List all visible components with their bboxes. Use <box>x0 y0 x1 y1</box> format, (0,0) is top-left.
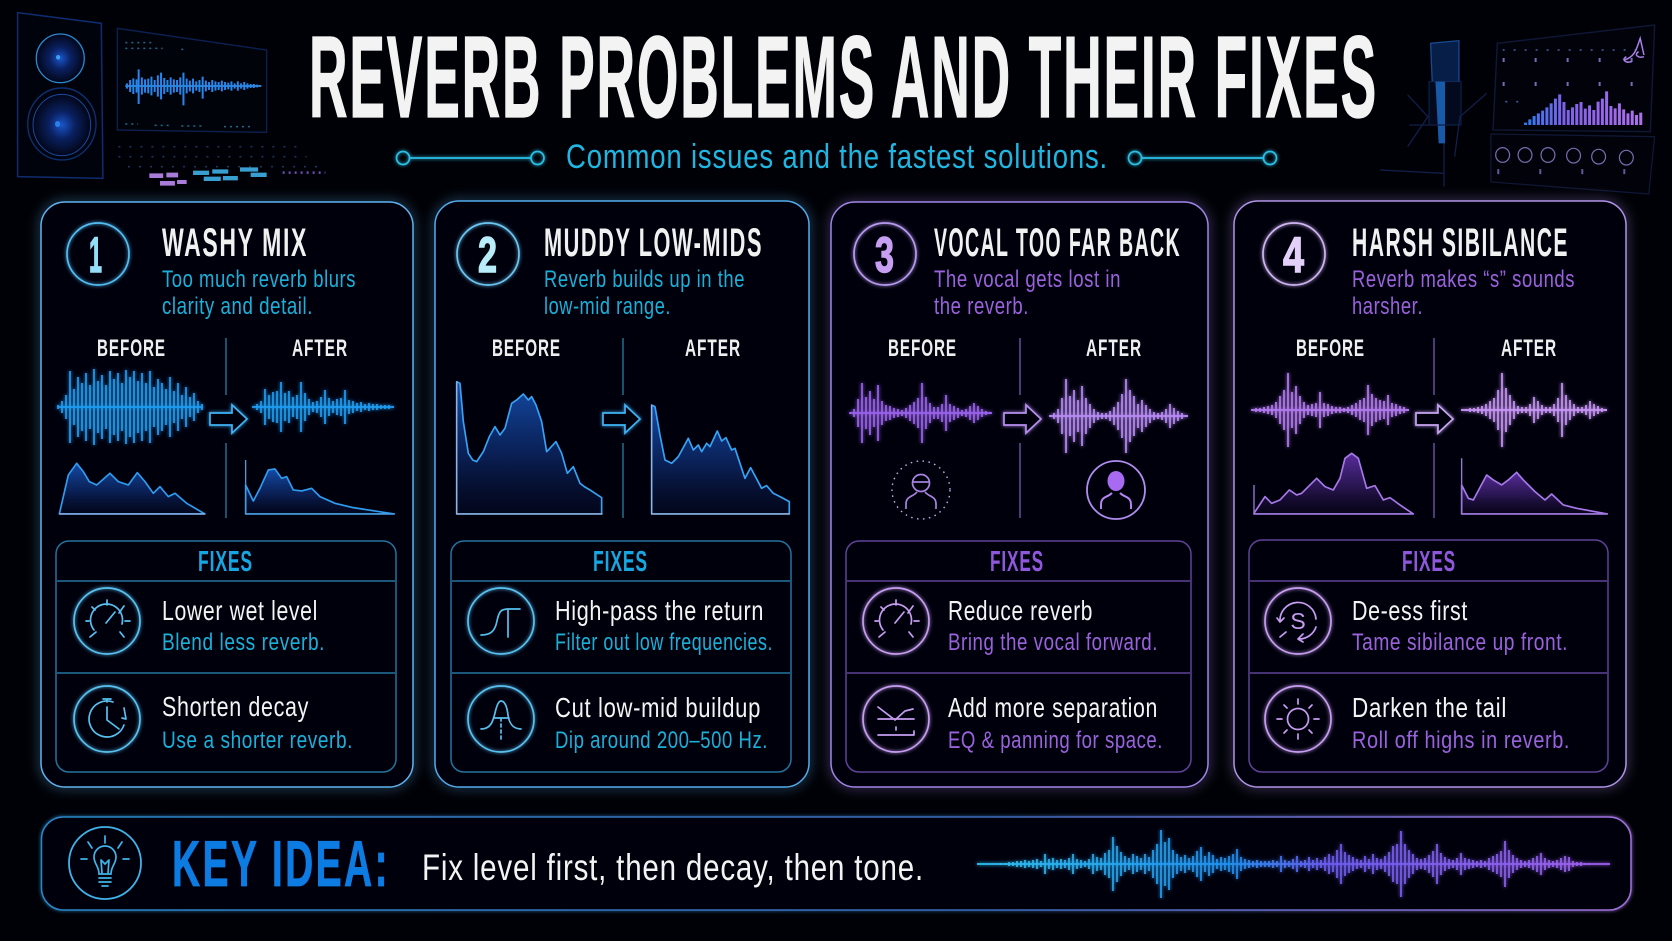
number badge 3 <box>854 223 916 285</box>
subtitle: Common issues and the fastest solutions. <box>566 138 1108 176</box>
panel frame <box>435 201 809 787</box>
description: clarity and detail. <box>162 293 313 320</box>
icon: gauge <box>74 588 140 654</box>
before label: BEFORE <box>1296 335 1365 362</box>
before label: BEFORE <box>492 335 561 362</box>
fixes heading: FIXES <box>990 546 1044 578</box>
waveform before <box>850 383 992 443</box>
waveform after <box>1462 373 1607 447</box>
fix 2 text: Add more separation <box>948 692 1158 723</box>
fix 2 text: Darken the tail <box>1352 692 1507 723</box>
fix 2 text: EQ & panning for space. <box>948 727 1163 754</box>
panel: 2 muddy low-mids <box>435 201 809 787</box>
after label: AFTER <box>1501 335 1557 362</box>
fixes box <box>1249 540 1608 772</box>
icon: gauge <box>863 588 929 654</box>
heading: MUDDY LOW-MIDS <box>544 221 763 265</box>
icon: light bulb <box>69 827 141 899</box>
fix 2 text: Use a shorter reverb. <box>162 727 353 754</box>
fix 1 text: Lower wet level <box>162 595 318 626</box>
fix 2 text: Shorten decay <box>162 691 309 722</box>
after label: AFTER <box>685 335 741 362</box>
fix 1 text <box>1352 595 1568 656</box>
number badge 2 <box>457 223 519 285</box>
icon: waveform monitor <box>117 28 267 132</box>
fixes box <box>451 541 791 772</box>
icon: sun <box>1265 686 1331 752</box>
icon: bell curve <box>468 686 534 752</box>
subtitle ornament right <box>1128 152 1277 164</box>
after label: AFTER <box>1086 335 1142 362</box>
number badge 1 <box>67 223 129 285</box>
fix 2 text <box>162 691 353 754</box>
description: Reverb builds up in the <box>544 266 745 293</box>
description: Reverb makes “s” sounds <box>1352 266 1575 293</box>
panel frame <box>831 202 1208 787</box>
fix 1 text: High-pass the return <box>555 595 764 626</box>
number badge 1: 1 <box>89 227 102 283</box>
key idea label: KEY IDEA: <box>172 827 390 900</box>
fix 2 text: Roll off highs in reverb. <box>1352 727 1570 754</box>
icon: microphone <box>1380 41 1487 187</box>
before label: BEFORE <box>888 335 957 362</box>
fix 2 text: Dip around 200–500 Hz. <box>555 727 768 754</box>
fix 1 text: Blend less reverb. <box>162 629 325 656</box>
fixes box <box>56 541 396 772</box>
fix 1 text: Tame sibilance up front. <box>1352 629 1568 656</box>
fixes heading: FIXES <box>1402 546 1456 578</box>
panel: key idea banner <box>42 817 1631 910</box>
panel frame <box>41 202 413 787</box>
fix 1 text: Reduce reverb <box>948 595 1093 626</box>
fix 2 text <box>555 692 768 754</box>
heading: WASHY MIX <box>162 221 308 265</box>
header art: studio speaker, monitor and controller <box>18 13 325 186</box>
fix 2 text <box>948 692 1163 754</box>
description: low-mid range. <box>544 293 671 320</box>
fix 1 text: Filter out low frequencies. <box>555 629 773 656</box>
description: Too much reverb blurs <box>162 266 356 293</box>
fix 2 text: Cut low-mid buildup <box>555 692 761 723</box>
icon: clear vocalist <box>1087 461 1145 519</box>
icon: speaker cabinet <box>18 13 103 178</box>
spectrum before and after <box>457 382 790 514</box>
waveform after <box>1050 379 1188 453</box>
icon: clock <box>74 686 140 752</box>
number badge 3: 3 <box>875 227 894 283</box>
number badge 2: 2 <box>478 227 497 283</box>
banner frame <box>42 817 1631 910</box>
icon: de-ess: S <box>1290 608 1306 634</box>
arrow <box>210 405 247 433</box>
key idea statement: Fix level first, then decay, then tone. <box>422 847 924 888</box>
spectrum before and after <box>1254 453 1607 514</box>
number badge 4: 4 <box>1283 227 1304 283</box>
description <box>544 266 745 320</box>
waveform blue to purple <box>977 830 1610 898</box>
waveform after <box>253 382 393 432</box>
fix 1 text: Bring the vocal forward. <box>948 629 1158 656</box>
panel: 3 vocal too far back <box>831 202 1208 787</box>
arrow <box>603 405 640 433</box>
icon: controller with pads <box>118 147 325 186</box>
fixes heading: FIXES <box>593 546 648 578</box>
fix 2 text <box>1352 692 1570 754</box>
arrow <box>1416 405 1453 433</box>
spectrum before and after <box>59 460 394 514</box>
waveform before <box>1252 373 1409 447</box>
description: the reverb. <box>934 293 1029 320</box>
description <box>934 266 1121 320</box>
number badge 4 <box>1263 223 1325 285</box>
fixes heading: FIXES <box>198 546 253 578</box>
description <box>1352 266 1575 320</box>
icon: high-pass curve <box>468 588 534 654</box>
icon: EQ and panning <box>863 686 929 752</box>
arrow <box>1004 405 1041 433</box>
waveform before <box>58 369 203 445</box>
after label: AFTER <box>292 335 348 362</box>
icon: faded vocalist <box>892 461 950 519</box>
fix 1 text <box>555 595 773 656</box>
fix 1 text <box>162 595 325 656</box>
fixes box <box>846 541 1191 772</box>
subtitle ornament left <box>396 152 544 164</box>
description <box>162 266 356 320</box>
icon: rack knobs <box>1491 134 1655 194</box>
icon: rack screen with spectrum <box>1493 25 1655 132</box>
description: harsher. <box>1352 293 1423 320</box>
panel frame <box>1234 201 1626 787</box>
panel: 1 washy mix <box>41 202 413 787</box>
before label: BEFORE <box>97 335 166 362</box>
panel: 4 harsh sibilance <box>1234 201 1626 787</box>
header art: microphone and rack <box>1380 25 1655 194</box>
fix 1 text: De-ess first <box>1352 595 1468 626</box>
description: The vocal gets lost in <box>934 266 1121 293</box>
fix 1 text <box>948 595 1158 656</box>
icon: de-ess <box>1265 588 1331 654</box>
panel: 3 vocal too far back: VOCAL TOO FAR BACK <box>934 221 1181 265</box>
